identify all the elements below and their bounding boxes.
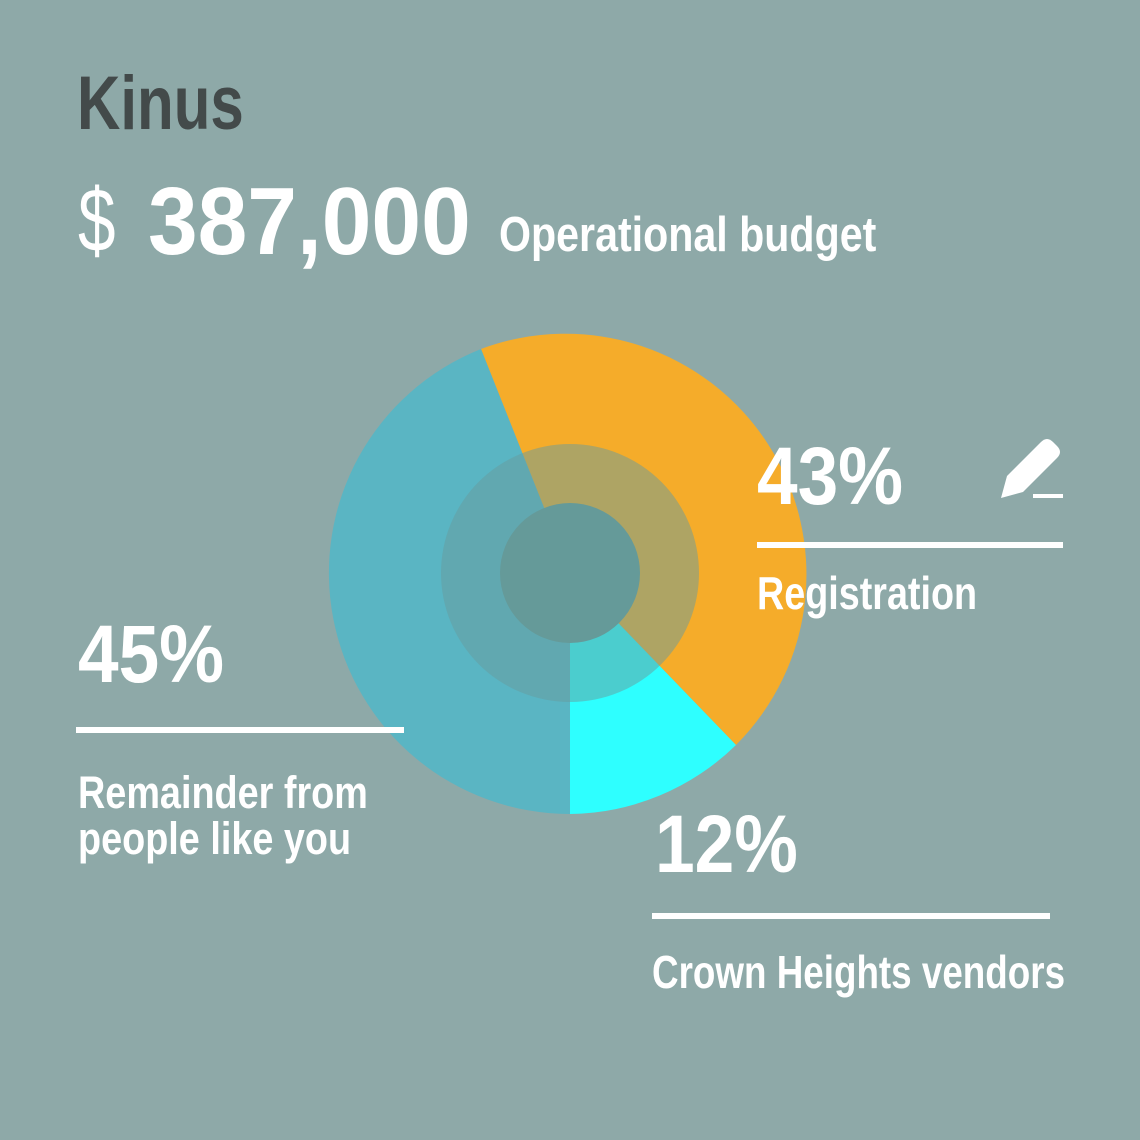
title: Kinus [77, 61, 244, 146]
label: vendors 12%: 12% [655, 799, 798, 890]
label: vendors 12%: Crown Heights vendors [652, 946, 1065, 998]
label: registration 43% [757, 431, 1063, 619]
budget figure: Operational budget [499, 208, 876, 262]
label: vendors 12% [652, 799, 1065, 998]
label: registration 43%: 43% [757, 431, 903, 522]
label: remainder 45% [76, 609, 404, 864]
budget figure: $ [78, 171, 116, 271]
label: remainder 45%: Remainder from [78, 767, 368, 818]
label: remainder 45%: people like you [78, 813, 351, 864]
icon: pencil [1001, 439, 1063, 498]
label: registration 43%: Registration [757, 567, 977, 619]
budget figure [78, 168, 876, 275]
budget figure: 387,000 [148, 168, 471, 275]
label: remainder 45%: 45% [78, 609, 224, 700]
